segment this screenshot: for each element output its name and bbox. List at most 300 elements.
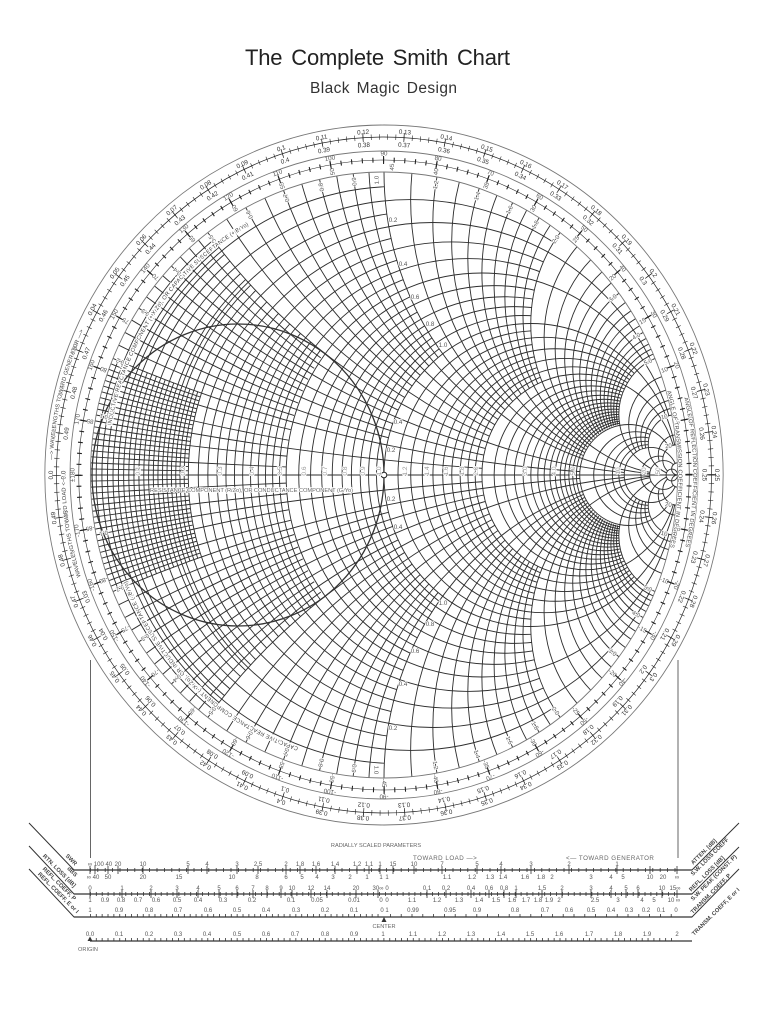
reflection coefficient and peak labels: 4 [609, 886, 613, 892]
wavelengths toward load labels: 0.23 [689, 550, 699, 564]
right scale names [688, 837, 742, 937]
E or I coefficient labels: 0.4 [262, 908, 271, 914]
reflection angle labels: 80 [434, 155, 442, 163]
reflection coefficient and peak labels: 0.1 [423, 886, 432, 892]
interior grid labels: 0.8 [426, 321, 435, 328]
SWR and return loss labels: 2.5 [254, 862, 263, 868]
wavelengths toward load labels: 0.45 [119, 273, 132, 288]
reflection coefficient and peak labels: 7 [251, 886, 255, 892]
transmission angle labels: 75 [121, 315, 130, 325]
reflection coefficient and peak labels: 4 [196, 886, 200, 892]
transmission angle labels: 35 [482, 181, 491, 190]
reflection coefficient and peak labels: 0.2 [442, 886, 451, 892]
reflection angle labels: -10 [686, 526, 695, 536]
reactance rim labels: 0.8 [316, 758, 325, 768]
reflection angle labels: 120 [222, 191, 235, 203]
wavelengths toward load labels: 0.43 [173, 214, 187, 227]
reflection angle labels: 70 [486, 169, 495, 178]
SWR and return loss labels: 1 [615, 862, 619, 868]
SWR and return loss labels: ∞ 40 [87, 875, 100, 881]
interior grid labels [387, 217, 448, 732]
wavelengths toward generator labels: 0.03 [70, 341, 81, 356]
wavelengths toward load labels: 0.11 [317, 794, 330, 804]
transmission angle labels [85, 163, 682, 788]
wavelengths toward load labels: 0.07 [173, 722, 187, 736]
origin scale labels: 1.7 [585, 932, 594, 938]
SWR and return loss labels: 10 [140, 862, 147, 868]
wavelengths toward load labels: 0.0 [61, 470, 68, 479]
curved captions: —> WAVELENGTHS TOWARD GENERATOR —> [50, 330, 82, 460]
reflection coefficient and peak labels: ∞ [676, 898, 680, 904]
wavelengths toward generator labels: 0.31 [619, 703, 633, 717]
real axis labels: 0.1 [135, 466, 142, 476]
wavelengths toward generator labels: 0.48 [57, 553, 67, 567]
reflection coefficient and peak labels: 5 [217, 886, 221, 892]
reflection coefficient and peak labels: 1 [120, 886, 124, 892]
real axis labels: 5.0 [570, 466, 577, 476]
interior grid labels: 0.8 [426, 621, 435, 628]
curved captions: CAPACITIVE REACTANCE COMPONENT (-jX/Zo), OR INDUCTIVE SUSCEPTANCE (-jB/Yo) [122, 580, 298, 750]
reflection coefficient and peak labels: 0 [88, 886, 92, 892]
E or I coefficient labels: 0.7 [174, 908, 183, 914]
reflection coefficient and peak labels: 0.2 [248, 898, 257, 904]
reactance rim labels: 1.0 [374, 175, 381, 184]
transmission angle labels: 70 [151, 271, 161, 281]
SWR and return loss labels: 3 [529, 862, 533, 868]
transmission angle labels: 85 [86, 417, 94, 425]
subtitle: Black Magic Design [310, 80, 457, 97]
transmission angle labels: 40 [432, 167, 441, 176]
SWR and return loss labels: 1.4 [331, 862, 340, 868]
wavelengths toward generator labels: 0.0 [48, 470, 55, 479]
wavelengths toward generator labels: 0.39 [315, 807, 328, 817]
reflection coefficient and peak labels: 0.8 [117, 898, 126, 904]
wavelengths toward load labels: 0.46 [98, 308, 110, 323]
SWR and return loss labels: ∞ [675, 875, 679, 881]
SWR and return loss labels: 6 [284, 875, 288, 881]
SWR and return loss labels: 10 [647, 875, 654, 881]
wavelengths toward generator labels: 0.2 [648, 268, 659, 279]
wavelengths toward load labels: 0.48 [69, 386, 79, 400]
reactance rim labels: 0.5 [207, 233, 218, 244]
SWR and return loss labels: 3 [331, 875, 335, 881]
real axis labels: 10 [615, 467, 622, 475]
E or I coefficient labels: 0.1 [350, 908, 359, 914]
wavelengths toward generator labels: 0.06 [135, 233, 149, 247]
reflection angle labels: 20 [672, 361, 681, 370]
real axis labels: 50 [655, 467, 662, 475]
wavelengths toward generator labels: 0.36 [439, 807, 453, 817]
wavelengths toward load labels: 0.26 [697, 427, 706, 441]
SWR and return loss labels: 5 [300, 875, 304, 881]
direction labels: TOWARD LOAD —> [413, 855, 477, 862]
transmission angle labels: 50 [329, 167, 337, 176]
SWR and return loss labels: 50 [105, 875, 112, 881]
SWR and return loss labels: 1 [379, 875, 383, 881]
reactance rim labels: 1.0 [372, 765, 379, 775]
reflection angle labels: 110 [272, 168, 284, 178]
wavelengths toward generator labels: 0.13 [399, 129, 412, 137]
interior grid labels: 0.4 [394, 524, 403, 531]
real axis labels: 0.3 [217, 466, 224, 476]
origin scale labels: 0.1 [115, 932, 124, 938]
reflection coefficient and peak labels: 6 [636, 886, 640, 892]
reactance rim labels: 0.3 [140, 306, 151, 317]
E or I coefficient labels: 0.1 [657, 908, 666, 914]
reflection angle labels [69, 150, 699, 800]
wavelengths toward generator labels: 0.19 [620, 233, 633, 248]
reactance rim labels: 0.1 [99, 412, 109, 420]
reactance rim labels: 0.7 [281, 747, 290, 758]
SWR and return loss labels: 20 [140, 875, 147, 881]
real axis labels: 1.6 [443, 466, 450, 476]
scale axes [29, 823, 739, 941]
transmission angle labels: -65 [186, 705, 197, 717]
wavelengths toward load labels: 0.49 [63, 427, 71, 440]
direction labels [413, 855, 654, 862]
reactance rim labels: 0.9 [351, 176, 359, 186]
reflection angle labels: -30 [648, 630, 659, 642]
wavelengths toward load labels: 0.21 [658, 627, 670, 642]
wavelengths toward load labels: 0.36 [437, 146, 451, 156]
wavelengths toward load labels: 0.32 [581, 214, 595, 228]
wavelengths toward load labels: 0.2 [637, 663, 648, 675]
transmission angle labels: 80 [99, 364, 108, 374]
wavelengths toward load labels: 0.09 [240, 768, 255, 779]
wavelengths toward generator labels: 0.32 [589, 733, 603, 746]
wavelengths toward generator labels: 0.17 [555, 179, 569, 192]
interior grid labels: 0.6 [411, 648, 420, 655]
wavelengths toward generator labels: 0.47 [69, 594, 80, 608]
wavelengths toward generator labels: 0.29 [669, 633, 681, 648]
SWR and return loss labels: 1 [365, 875, 369, 881]
wavelengths toward load labels: 0.05 [119, 661, 132, 676]
wavelengths toward generator labels: 0.43 [165, 732, 179, 746]
reflection coefficient and peak labels: 2.5 [591, 898, 600, 904]
wavelengths toward load labels: 0.1 [280, 784, 290, 794]
SWR and return loss labels: 15 [176, 875, 183, 881]
E or I coefficient labels: 0.9 [473, 908, 482, 914]
SWR and return loss labels: 5 [621, 875, 625, 881]
reactance rim labels: 1.6 [504, 735, 514, 746]
SWR and return loss labels: 20 [115, 862, 122, 868]
SWR and return loss labels [87, 862, 679, 881]
origin scale labels: 1.3 [467, 932, 476, 938]
wavelengths toward generator labels: 0.45 [108, 669, 121, 684]
reflection coefficient and peak labels: 1.9 [545, 898, 554, 904]
reactance rim labels: 0.1 [98, 528, 108, 537]
wavelengths toward generator labels: 0.49 [50, 511, 58, 525]
wavelengths toward generator labels: 0.16 [519, 159, 533, 171]
wavelengths toward generator labels: 0.42 [199, 758, 213, 771]
left scale names: REFL. COEFF, E or I [36, 872, 80, 915]
right scale names: TRANSM. COEFF, P [690, 873, 733, 916]
reactance rim labels: 1.2 [432, 179, 440, 190]
wavelengths toward load labels: 0.12 [357, 800, 370, 808]
wavelengths toward load labels: 0.3 [637, 275, 648, 287]
transmission angle labels: 45 [389, 163, 396, 171]
E or I coefficient labels: 0.9 [115, 908, 124, 914]
reactance rim labels: 10 [660, 413, 669, 421]
wavelengths toward generator labels: 0.46 [87, 633, 99, 647]
transmission angle labels: 15 [638, 316, 648, 326]
real axis [90, 474, 678, 476]
reflection coefficient and peak labels: 2 [560, 886, 564, 892]
real axis labels: 0.2 [180, 466, 187, 476]
origin scale labels [86, 932, 679, 938]
transmission angle labels: -80 [98, 575, 109, 585]
SWR and return loss labels: 4 [499, 862, 503, 868]
reflection coefficient and peak labels: 3 [616, 898, 620, 904]
transmission angle labels: -45 [380, 779, 387, 788]
reactance rim labels: 20 [665, 501, 673, 509]
wavelengths toward generator labels: 0.05 [109, 266, 122, 281]
origin scale labels: 1 [381, 932, 385, 938]
reactance rim labels: 3.0 [608, 293, 619, 304]
origin scale labels: 0.4 [203, 932, 212, 938]
reflection coefficient and peak labels: 0 [385, 898, 389, 904]
reflection angle labels: -110 [270, 771, 284, 782]
SWR and return loss labels: 1.3 [486, 875, 495, 881]
wavelengths toward load labels: 0.44 [144, 242, 158, 256]
origin scale labels: 1.2 [438, 932, 447, 938]
wavelengths toward generator labels: 0.35 [479, 796, 494, 807]
real axis labels: 20 [641, 467, 648, 475]
E or I coefficient labels: 0.7 [541, 908, 550, 914]
interior grid labels: 0.4 [394, 419, 403, 426]
wavelengths toward generator labels: 0.37 [398, 813, 411, 821]
transmission angle labels: 25 [572, 234, 581, 244]
E or I coefficient labels: 0.2 [321, 908, 330, 914]
SWR and return loss labels: 1.2 [468, 875, 477, 881]
wavelengths toward load labels: 0.29 [658, 309, 670, 324]
reactance rim labels: 10 [660, 530, 669, 538]
curved captions [50, 222, 698, 750]
reflection angle labels: 0 [692, 473, 699, 477]
transmission angle labels: -50 [327, 773, 336, 784]
reflection angle labels: -90 [379, 792, 388, 800]
real axis labels: 0.8 [342, 466, 349, 476]
wavelengths toward load labels: 0.18 [581, 723, 595, 736]
wavelengths toward load labels: 0.15 [476, 784, 490, 794]
origin scale labels: 0.7 [291, 932, 300, 938]
center marker: CENTER [372, 924, 396, 930]
wavelengths toward generator labels: 0.09 [236, 159, 250, 170]
reflection coefficient and peak labels: 6 [235, 886, 239, 892]
reactance rim labels: 0.4 [171, 672, 182, 684]
transmission angle labels: -60 [229, 736, 239, 748]
reactance rim labels: 0.6 [245, 208, 255, 220]
E or I coefficient labels [88, 908, 678, 914]
transmission angle labels: -40 [431, 773, 439, 784]
reflection coefficient and peak labels: 1.8 [534, 898, 543, 904]
wavelengths toward generator labels: 0.11 [315, 133, 329, 143]
SWR and return loss labels: 5 [475, 862, 479, 868]
reactance rim labels: 4.0 [631, 609, 642, 620]
transmission angle labels: -85 [85, 524, 95, 532]
reflection coefficient and peak labels: 0.7 [134, 898, 143, 904]
reflection coefficient and peak labels: 8 [265, 886, 269, 892]
real axis labels [135, 466, 662, 476]
wavelengths toward load labels: 0.01 [62, 509, 71, 523]
origin scale labels: 1.1 [409, 932, 418, 938]
transmission angle labels: 10 [660, 366, 670, 375]
wavelengths toward generator labels: 0.27 [701, 553, 711, 568]
interior grid labels: 0.2 [387, 447, 396, 454]
wavelengths toward generator labels: 0.01 [50, 425, 58, 439]
wavelengths toward generator labels: 0.12 [357, 129, 370, 137]
reactance rim labels: 0.2 [115, 356, 126, 366]
reflection angle labels: -170 [73, 523, 82, 538]
reflection coefficient and peak labels: 9 [279, 886, 283, 892]
reactance rim labels: 2.0 [551, 233, 562, 245]
reflection angle labels: -100 [323, 786, 337, 796]
SWR and return loss labels: 2 [550, 875, 554, 881]
wavelengths toward load labels: 0.39 [318, 146, 331, 155]
wavelengths toward load labels: 0.38 [358, 142, 371, 150]
transmission angle labels: 65 [187, 233, 197, 244]
left scale names [36, 853, 80, 915]
SWR and return loss labels: ∞ 100 40 [88, 862, 113, 868]
SWR and return loss labels: 1 [378, 862, 382, 868]
origin scale labels: 1.4 [497, 932, 506, 938]
reflection angle labels: -160 [86, 577, 97, 592]
real axis labels: 0.5 [277, 466, 284, 476]
reactance rim labels: 4.0 [631, 331, 642, 342]
reflection coefficient and peak labels: 3 [589, 886, 593, 892]
panel heading: RADIALLY SCALED PARAMETERS [331, 843, 421, 849]
reactance rim labels: 1.4 [472, 749, 481, 760]
reactance rim labels: 5.0 [643, 357, 654, 367]
reflection angle labels: 60 [535, 192, 545, 202]
reflection coefficient and peak labels: 0.4 [467, 886, 476, 892]
reflection coefficient and peak labels: 1 [514, 886, 518, 892]
wavelengths toward load labels: 0.13 [397, 800, 410, 808]
E or I coefficient labels: 0.6 [565, 908, 574, 914]
wavelengths toward generator labels: 0.1 [276, 144, 287, 154]
E or I coefficient labels: 0.8 [511, 908, 520, 914]
reflection angle labels: 100 [324, 154, 336, 163]
wavelengths toward generator labels: 0.41 [235, 779, 249, 791]
reflection angle labels: -60 [534, 748, 545, 759]
reflection coefficient and peak labels: 1.1 [408, 898, 417, 904]
reflection coefficient and peak labels: 1 [88, 898, 92, 904]
wavelengths toward generator labels: 0.07 [165, 204, 179, 217]
right scale names: TRANSM. COEFF, E or I [691, 887, 742, 937]
transmission angle labels: 5 [676, 418, 681, 426]
scale rings [44, 124, 724, 826]
E or I coefficient labels: 0.3 [292, 908, 301, 914]
reflection angle labels: -70 [485, 772, 496, 782]
real axis labels: 1.0 [376, 466, 383, 476]
real axis labels: 1.2 [402, 466, 409, 476]
reflection angle labels: 170 [73, 413, 82, 425]
SWR and return loss labels: 4 [205, 862, 209, 868]
reflection coefficient and peak labels: 3 [175, 886, 179, 892]
reflection angle labels: 50 [579, 224, 589, 234]
transmission angle labels: -10 [659, 576, 670, 586]
reflection coefficient and peak labels: 1.4 [475, 898, 484, 904]
reflection coefficient and peak labels: 14 [324, 886, 331, 892]
SWR and return loss labels: 1.6 [312, 862, 321, 868]
ring arcs [45, 125, 723, 825]
transmission angle labels: -55 [276, 759, 286, 770]
wavelengths toward load labels: 0.24 [697, 510, 705, 523]
origin scale labels: 1.8 [614, 932, 623, 938]
real axis labels: 0.4 [249, 466, 256, 476]
direction labels: <— TOWARD GENERATOR [566, 855, 654, 862]
wavelengths toward generator labels: 0.44 [135, 702, 148, 717]
wavelengths toward generator labels [48, 129, 720, 821]
reflection coefficient and peak labels: 5 [652, 898, 656, 904]
transmission angle labels: -15 [637, 624, 648, 635]
wavelengths toward generator labels: 0.14 [440, 133, 453, 143]
E or I coefficient labels: 0.2 [642, 908, 651, 914]
wavelengths toward load labels: 0.41 [241, 170, 255, 182]
origin scale labels: 0.6 [262, 932, 271, 938]
reflection coefficient and peak labels: 0.3 [219, 898, 228, 904]
wavelengths toward load labels: 0.47 [81, 346, 92, 361]
transmission angle labels: 30 [529, 203, 539, 213]
wavelengths toward generator labels: 0.4 [276, 796, 286, 806]
SWR and return loss labels: 2 [284, 862, 288, 868]
transmission angle labels: -20 [607, 668, 618, 679]
reactance rim labels: 1.8 [529, 720, 540, 732]
reflection angle labels: -80 [433, 787, 443, 796]
reflection coefficient and peak labels: 1.5 [492, 898, 501, 904]
SWR and return loss labels: 1.1 [443, 875, 452, 881]
reflection coefficient and peak labels: 1.5 [538, 886, 547, 892]
title: The Complete Smith Chart [245, 45, 510, 70]
reactance rim labels: 0.9 [350, 764, 357, 774]
reflection coefficient and peak labels: 0.6 [152, 898, 161, 904]
wavelengths toward load labels: 0.14 [437, 795, 450, 804]
E or I coefficient labels: 1 [88, 908, 92, 914]
reflection coefficient and peak labels: 0.9 [101, 898, 110, 904]
SWR and return loss labels: 1.6 [521, 875, 530, 881]
reflection coefficient and peak labels: 0.01 [348, 898, 360, 904]
VSWR circle [92, 324, 384, 626]
SWR and return loss labels: 4 [315, 875, 319, 881]
real axis labels: 3.0 [522, 466, 529, 476]
SWR and return loss labels: 4 [609, 875, 613, 881]
interior grid labels: 1.0 [439, 600, 448, 607]
interior grid labels: 1.0 [439, 342, 448, 349]
SWR and return loss labels: 10 [411, 862, 418, 868]
wavelengths toward generator labels: 0.23 [701, 383, 711, 397]
E or I coefficient labels: 0.5 [587, 908, 596, 914]
wavelengths toward load labels: 0.25 [700, 469, 707, 482]
reactance rim labels: 0.3 [139, 632, 150, 643]
E or I coefficient labels: 0.8 [145, 908, 154, 914]
E or I coefficient labels: 0.6 [204, 908, 213, 914]
reactance rim labels: 1.2 [431, 760, 439, 771]
right scale names: ATTEN. [dB] [690, 838, 718, 866]
wavelengths toward generator labels: 0.15 [480, 143, 494, 154]
reflection coefficient and peak labels: 1.2 [433, 898, 442, 904]
interior grid labels: 0.2 [387, 496, 396, 503]
wavelengths toward load labels: 0.37 [398, 142, 411, 150]
interior grid labels: 0.6 [411, 294, 420, 301]
origin marker [78, 936, 98, 953]
reflection angle labels: 30 [649, 310, 658, 320]
wavelengths toward generator labels: 0.33 [555, 758, 569, 771]
E or I coefficient labels: 0 [380, 908, 384, 914]
E or I coefficient labels: 0.4 [607, 908, 616, 914]
reflection coefficient and peak labels: 0.1 [287, 898, 296, 904]
reactance rim labels: 0.4 [172, 265, 183, 277]
radially scaled parameters panel [29, 823, 742, 953]
